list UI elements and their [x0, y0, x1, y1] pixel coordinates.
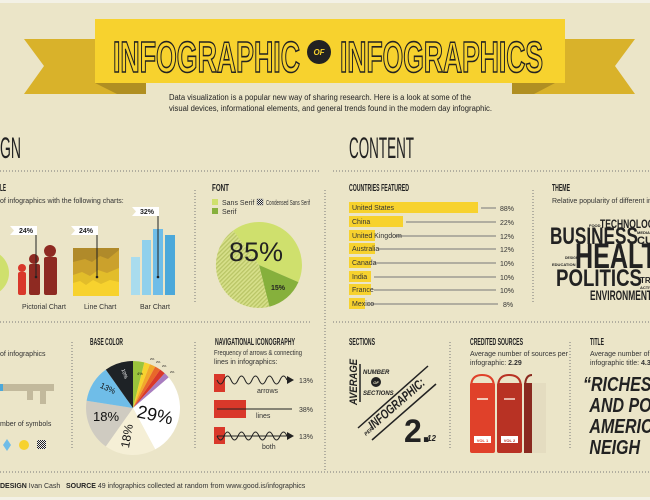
- panel: countries featured: Australia: [352, 246, 379, 253]
- panel: font: Serif: [222, 209, 236, 216]
- panel: navigational iconography: lines: [256, 413, 271, 420]
- panel: credited sources: infographic: 2.29: [470, 360, 522, 367]
- panel: theme word cloud: DESIGN: [565, 256, 579, 260]
- panel: countries featured: 12%: [500, 234, 514, 241]
- panel: countries featured: 22%: [500, 220, 514, 227]
- panel: chart types: Line Chart: [84, 304, 116, 311]
- panel: countries featured: United Kingdom: [352, 233, 402, 240]
- title ribbon: [24, 19, 635, 94]
- panel: navigational iconography: both: [262, 444, 276, 451]
- text: GN: [0, 132, 21, 165]
- pie: base color: 2%: [150, 357, 155, 361]
- panel: title: TITLE: [590, 337, 604, 348]
- panel: sections: SECTIONS: [349, 337, 375, 348]
- panel: countries featured: 12%: [500, 247, 514, 254]
- panel: credited sources: CREDITED SOURCES: [470, 337, 523, 348]
- panel: theme word cloud: MEDIA: [637, 230, 650, 235]
- green circle (pie chart partial): [0, 250, 9, 296]
- panel: countries featured: Canada: [352, 260, 377, 267]
- panel: sections: INFOGRAPHIC:: [365, 375, 428, 432]
- panel: credited sources: [470, 337, 569, 453]
- panel: navigational iconography: lines in infographics:: [214, 359, 277, 366]
- pie: base color: 18%: [93, 409, 119, 424]
- panel: font: Condensed Sans Serif: [266, 200, 310, 207]
- footer: SOURCE 49 infographics collected at random from www.good.is/infographics: [66, 483, 306, 490]
- panel: sections: NUMBER: [363, 370, 390, 376]
- panel: sections: AVERAGE: [348, 358, 360, 406]
- panel: chart types: [0, 183, 175, 311]
- panel: title: NEIGH: [589, 436, 641, 458]
- pie: base color: [86, 357, 180, 455]
- panel: theme word cloud: EDUCATION: [552, 262, 576, 267]
- panel: chart types: Bar Chart: [140, 304, 170, 311]
- panel: symbols: [0, 351, 54, 451]
- panel: theme word cloud: [550, 183, 650, 303]
- panel: theme word cloud: FOOD: [589, 223, 601, 228]
- panel: navigational iconography: 13%: [299, 434, 313, 441]
- panel: base color: BASE COLOR: [90, 337, 123, 348]
- panel: navigational iconography: 13%: [299, 378, 313, 385]
- panel: chart types: LE: [0, 183, 6, 194]
- panel: countries featured: United States: [352, 205, 395, 212]
- panel: countries featured: India: [352, 274, 367, 281]
- panel: countries featured: France: [352, 287, 374, 294]
- pie: base color: 2%: [156, 360, 161, 364]
- panel: base color: [86, 337, 180, 455]
- panel: countries featured: 88%: [500, 206, 514, 213]
- panel: sections: 12: [427, 434, 436, 443]
- flags: 24%: [79, 228, 94, 235]
- pie: base color: 10%: [119, 368, 129, 380]
- panel: sections: 2.: [404, 413, 431, 449]
- icon: key: [0, 384, 54, 404]
- panel: chart types: Pictorial Chart: [22, 304, 66, 311]
- flags: [10, 207, 159, 278]
- pie: font: [216, 222, 302, 308]
- panel: symbols: of infographics: [0, 351, 46, 358]
- icons: symbols: [3, 439, 46, 451]
- panel: font: Sans Serif: [222, 200, 254, 207]
- subtitle: Data visualization is a popular new way of sharing research. Here is a look at some of the: [169, 93, 472, 102]
- panel: sections: SECTIONS: [363, 391, 394, 397]
- panel: navigational iconography: NAVIGATIONAL ICONOGRAPHY: [215, 337, 295, 348]
- panel: sections: PER: [363, 426, 375, 438]
- panel: countries featured: 10%: [500, 261, 514, 268]
- icon: books: [470, 375, 546, 453]
- pie: font: 85%: [229, 237, 283, 267]
- pie: base color: 13%: [99, 381, 117, 396]
- pie: base color: 29%: [135, 401, 175, 429]
- pie: base color: 2%: [170, 370, 175, 374]
- footer: DESIGN Ivan Cash: [0, 483, 60, 490]
- panel: title: [583, 337, 650, 458]
- title: OF: [313, 48, 326, 57]
- panel: countries featured: COUNTRIES FEATURED: [349, 183, 409, 194]
- icon: books: VOL 2: [504, 438, 516, 443]
- panel: navigational iconography: arrows: [257, 388, 279, 395]
- panel: font: [212, 183, 310, 308]
- pie: font: 15%: [271, 285, 286, 292]
- text: CONTENT: [349, 132, 414, 165]
- pie: base color: 4%: [137, 371, 143, 376]
- panel: navigational iconography: 38%: [299, 407, 313, 414]
- panel: countries featured: 8%: [503, 302, 513, 309]
- panel: theme word cloud: THEME: [552, 183, 570, 194]
- title: INFOGRAPHIC: [113, 33, 300, 82]
- panel: font: FONT: [212, 183, 229, 194]
- subtitle: visual devices, informational elements, and general trends found in the modern day infographic.: [169, 104, 492, 113]
- panel: credited sources: Average number of sources per: [470, 351, 569, 358]
- pie: base color: 18%: [118, 423, 136, 449]
- panel: countries featured: [349, 183, 514, 309]
- line chart: [73, 248, 119, 296]
- flags: 24%: [19, 228, 34, 235]
- panel: countries featured: 10%: [500, 275, 514, 282]
- panel: countries featured: 10%: [500, 288, 514, 295]
- pie: base color: 2%: [162, 364, 167, 368]
- panel: symbols: mber of symbols: [0, 421, 52, 428]
- panel: sections: OF: [373, 380, 379, 385]
- panel: navigational iconography: Frequency of arrows & connecting: [214, 350, 302, 357]
- panel: navigational iconography: [214, 337, 313, 451]
- panel: countries featured: Mexico: [352, 301, 374, 308]
- bar chart: [131, 229, 175, 295]
- pictorial chart: [18, 245, 57, 295]
- icon: books: VOL 1: [477, 438, 489, 443]
- flags: 32%: [140, 209, 155, 216]
- subtitle: [169, 93, 492, 113]
- panel: countries featured: China: [352, 219, 370, 226]
- panel: sections: [348, 337, 436, 449]
- panel: chart types: of infographics with the following charts:: [0, 198, 124, 205]
